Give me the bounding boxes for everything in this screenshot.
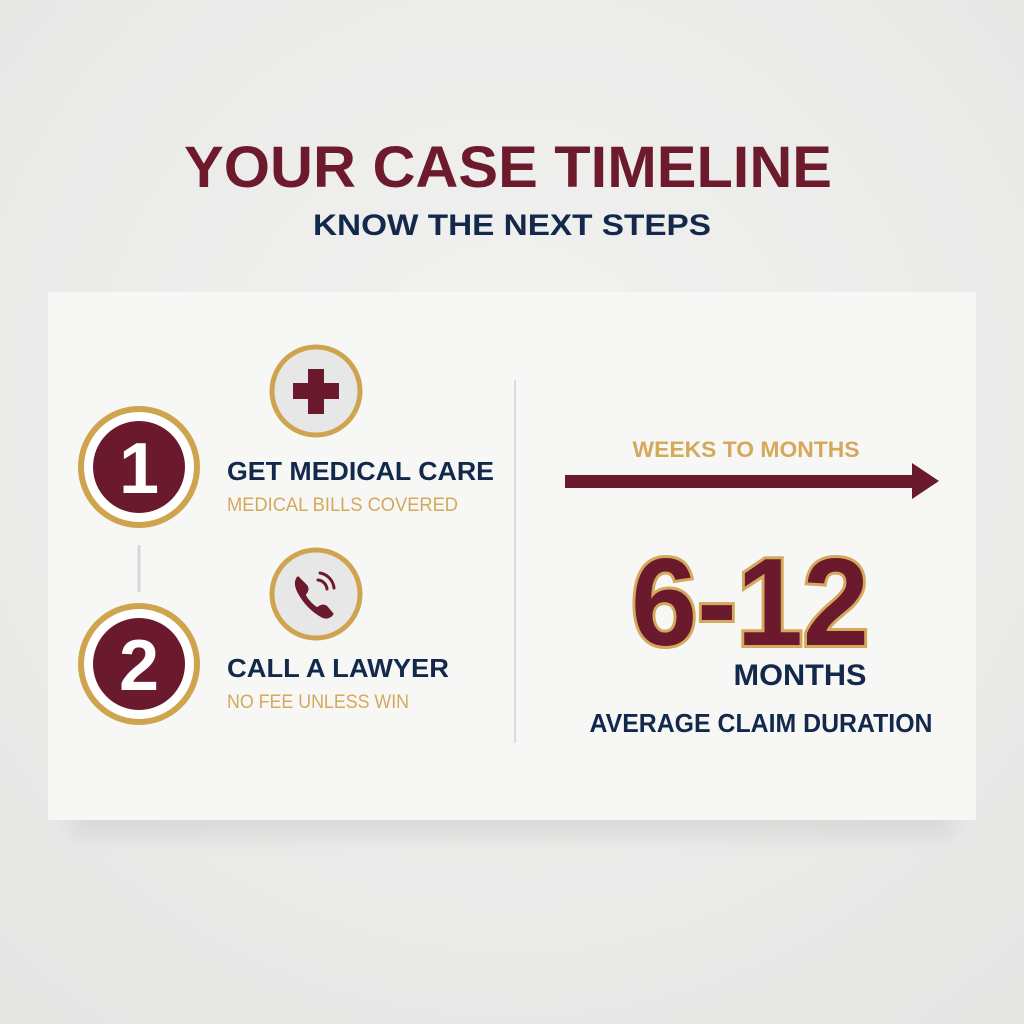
card shadow xyxy=(70,805,954,835)
arrow xyxy=(565,463,939,499)
caption: AVERAGE CLAIM DURATION xyxy=(590,708,932,738)
icon: medical cross xyxy=(272,347,360,435)
step 2 badge: 2 xyxy=(119,626,159,706)
panel: timeline card xyxy=(48,292,976,820)
step 2 subtext: NO FEE UNLESS WIN xyxy=(227,692,409,713)
step 1 subtext: MEDICAL BILLS COVERED xyxy=(227,495,458,516)
step 1 badge: 1 xyxy=(119,429,159,509)
big number: 6-12 xyxy=(631,534,869,672)
title: YOUR CASE TIMELINE xyxy=(184,135,832,200)
arrow label: WEEKS TO MONTHS xyxy=(632,437,860,462)
subtitle: KNOW THE NEXT STEPS xyxy=(313,209,711,242)
divider xyxy=(514,380,516,743)
step 1 badge xyxy=(81,409,197,525)
step 2 heading: CALL A LAWYER xyxy=(227,653,449,683)
icon: phone xyxy=(272,550,360,638)
step 1 heading: GET MEDICAL CARE xyxy=(227,456,494,486)
step 2 badge xyxy=(81,606,197,722)
connector line xyxy=(138,545,140,592)
months label: MONTHS xyxy=(734,659,866,692)
